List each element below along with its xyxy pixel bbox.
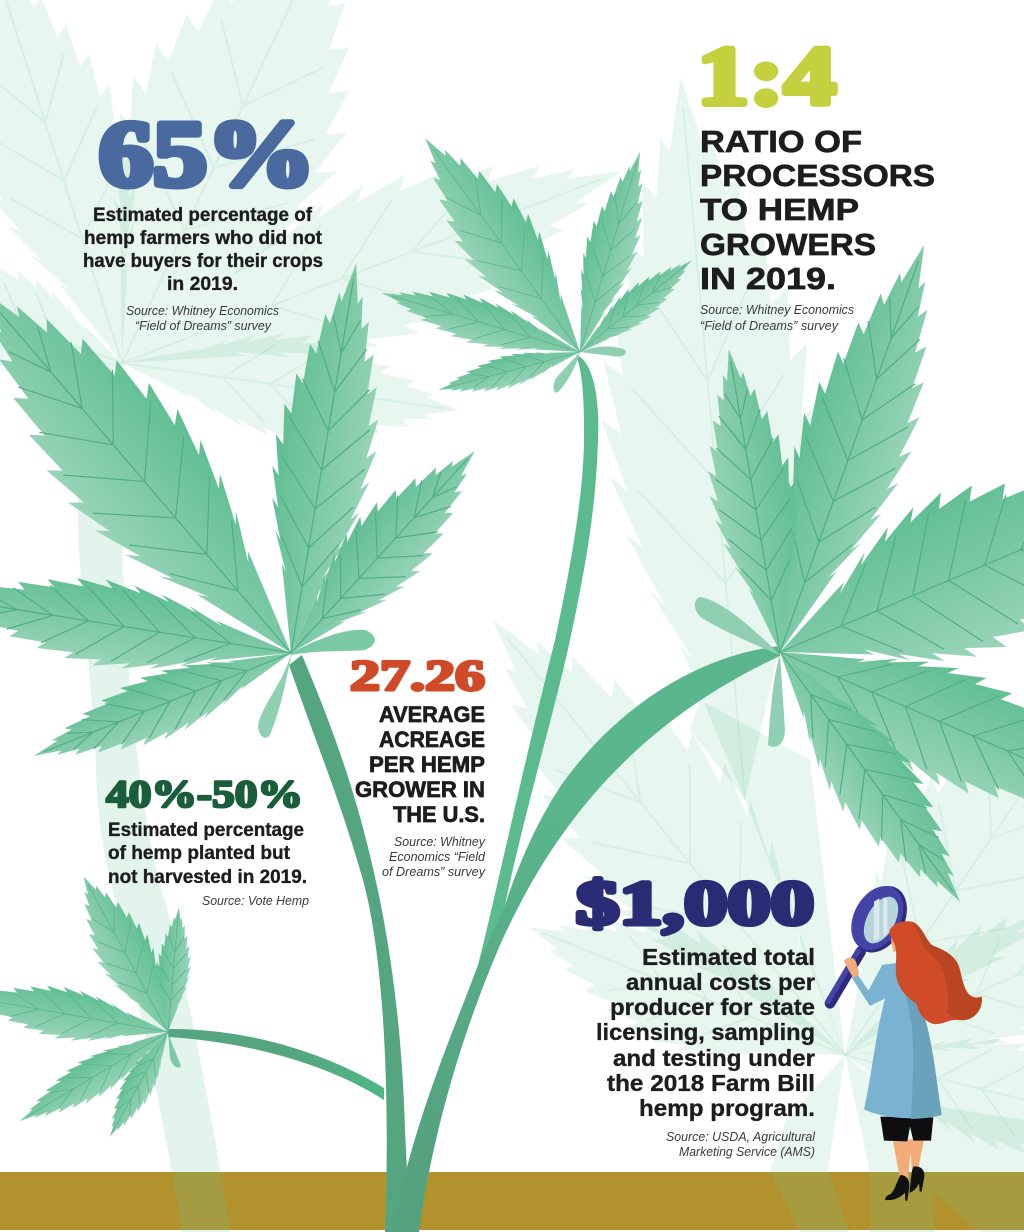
- description: producer for state: [610, 994, 815, 1020]
- description: PER HEMP: [369, 752, 485, 777]
- source: “Field of Dreams” survey: [700, 319, 839, 333]
- illustration: woman with magnifying glass: [828, 877, 982, 1201]
- legs: [893, 1139, 924, 1178]
- description: and testing under: [613, 1045, 815, 1071]
- description: [355, 702, 485, 827]
- source: Source: USDA, Agricultural: [666, 1130, 816, 1144]
- description: GROWERS: [700, 227, 876, 262]
- description: [83, 205, 323, 295]
- description: RATIO OF: [700, 124, 862, 159]
- stat: 65%: [83, 103, 323, 333]
- description: IN 2019.: [700, 261, 836, 296]
- skirt: [880, 1117, 933, 1141]
- description: THE U.S.: [393, 802, 485, 827]
- description: TO HEMP: [700, 192, 859, 227]
- description: [700, 124, 935, 296]
- stem: left plant: [289, 655, 410, 1232]
- background pale leaf: top left: [0, 0, 650, 464]
- description: of hemp planted but: [108, 843, 291, 864]
- number 65%: 65%: [99, 103, 315, 206]
- face: [891, 938, 899, 952]
- description: hemp program.: [639, 1095, 815, 1121]
- source: of Dreams” survey: [382, 865, 486, 879]
- leaf: small lower left: [0, 863, 196, 1145]
- source: Source: Whitney Economics: [126, 304, 279, 318]
- description: annual costs per: [626, 969, 815, 995]
- ground: [0, 1172, 1024, 1230]
- number 40%-50%: 40%-50%: [106, 773, 303, 816]
- coat: [852, 963, 942, 1119]
- hair: [889, 921, 982, 1024]
- stat: 1:4: [697, 30, 935, 333]
- description: PROCESSORS: [700, 158, 935, 193]
- stem: right plant: [393, 646, 780, 1232]
- source: Source: Whitney: [394, 835, 486, 849]
- description: Estimated total: [642, 944, 815, 970]
- source: Economics “Field: [389, 850, 486, 864]
- background pale stem: [78, 363, 230, 1232]
- description: in 2019.: [167, 274, 238, 295]
- hand: [844, 958, 859, 978]
- shoes: [885, 1166, 924, 1201]
- background pale leaf: lower right: [423, 68, 1024, 1232]
- magnifying glass: [828, 877, 918, 1003]
- leaf: large right: [686, 226, 1024, 926]
- stat: $1,000: [576, 870, 816, 1159]
- source: Source: Vote Hemp: [202, 894, 309, 908]
- source: [126, 304, 279, 333]
- stat: 27.26: [350, 653, 486, 879]
- description: have buyers for their crops: [83, 251, 323, 272]
- description: hemp farmers who did not: [84, 228, 323, 249]
- leaf: large left: [0, 241, 505, 787]
- source: [382, 835, 486, 879]
- description: ACREAGE: [379, 727, 485, 752]
- number 1:4: 1:4: [697, 30, 836, 123]
- description: [596, 944, 815, 1121]
- source: [666, 1130, 816, 1159]
- stat: 40%-50%: [106, 773, 309, 908]
- source: [700, 303, 854, 333]
- description: GROWER IN: [355, 777, 485, 802]
- leaf: top centre: [375, 115, 703, 406]
- stem: small plant branch: [168, 1029, 384, 1100]
- source: Marketing Service (AMS): [679, 1145, 815, 1159]
- stem: centre plant: [478, 355, 598, 966]
- description: not harvested in 2019.: [108, 867, 307, 888]
- number 27.26: 27.26: [350, 653, 485, 700]
- description: Estimated percentage of: [93, 205, 313, 226]
- description: AVERAGE: [379, 702, 485, 727]
- description: Estimated percentage: [108, 820, 304, 841]
- description: licensing, sampling: [596, 1019, 815, 1045]
- source: “Field of Dreams” survey: [135, 319, 272, 333]
- description: the 2018 Farm Bill: [607, 1070, 815, 1096]
- number $1,000: $1,000: [576, 870, 814, 938]
- description: [108, 820, 307, 888]
- source: Source: Whitney Economics: [700, 303, 854, 317]
